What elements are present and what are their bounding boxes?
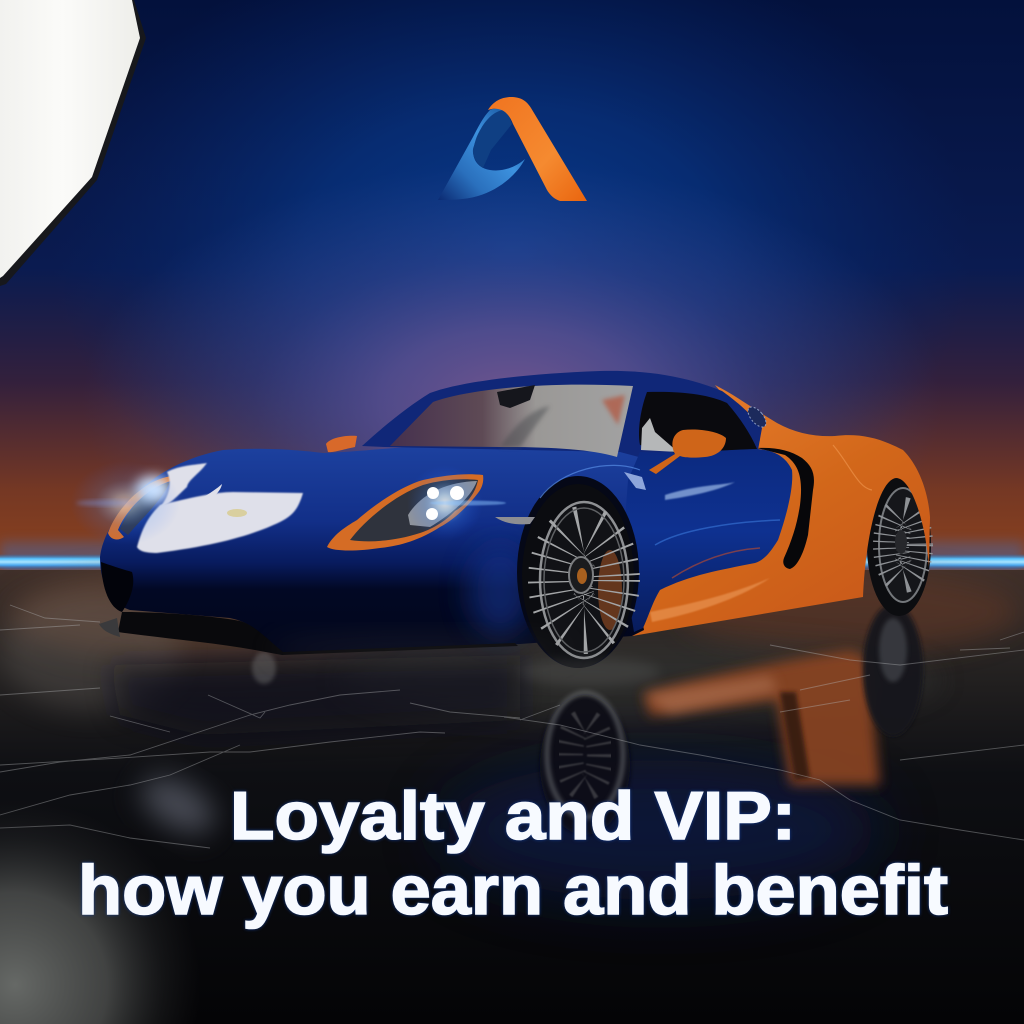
left mirror [326,436,357,452]
side marker [495,517,535,524]
front grille and splitter [101,562,133,612]
blue light on front flank [468,544,532,636]
glare streak [76,500,140,506]
hood badge [227,509,247,517]
mist over car underside [270,636,660,686]
side air intake [757,448,814,569]
sill highlight [650,578,770,622]
marble floor [0,569,1024,1024]
front wheel [522,484,634,668]
floor reflection of the car [110,604,923,844]
headlight glare left [70,461,180,545]
title line 1: Loyalty and VIP: [230,778,796,854]
rear badge [745,404,769,430]
background: studio gradient backdrop [0,0,1024,570]
hood reflections [137,463,303,553]
front wheel arch [517,476,639,668]
windshield [390,385,633,457]
marble veins [0,605,1024,848]
right mirror [649,429,726,474]
bottom-left floor mist [0,790,200,1024]
neon horizon line [0,542,1024,582]
title [78,778,948,929]
roof and pillars [362,371,762,460]
sports car [70,371,931,668]
side window [639,392,757,453]
left headlight [108,476,172,540]
blue lower body and hood [100,443,650,654]
rear fender crease [833,445,872,490]
title line 2: how you earn and benefit [78,851,948,929]
softbox light, top left [0,0,146,286]
blue door [622,449,792,632]
orange rear body [632,385,930,636]
logo mark [438,97,587,201]
rear wheel [867,474,931,616]
right headlight [327,465,506,550]
